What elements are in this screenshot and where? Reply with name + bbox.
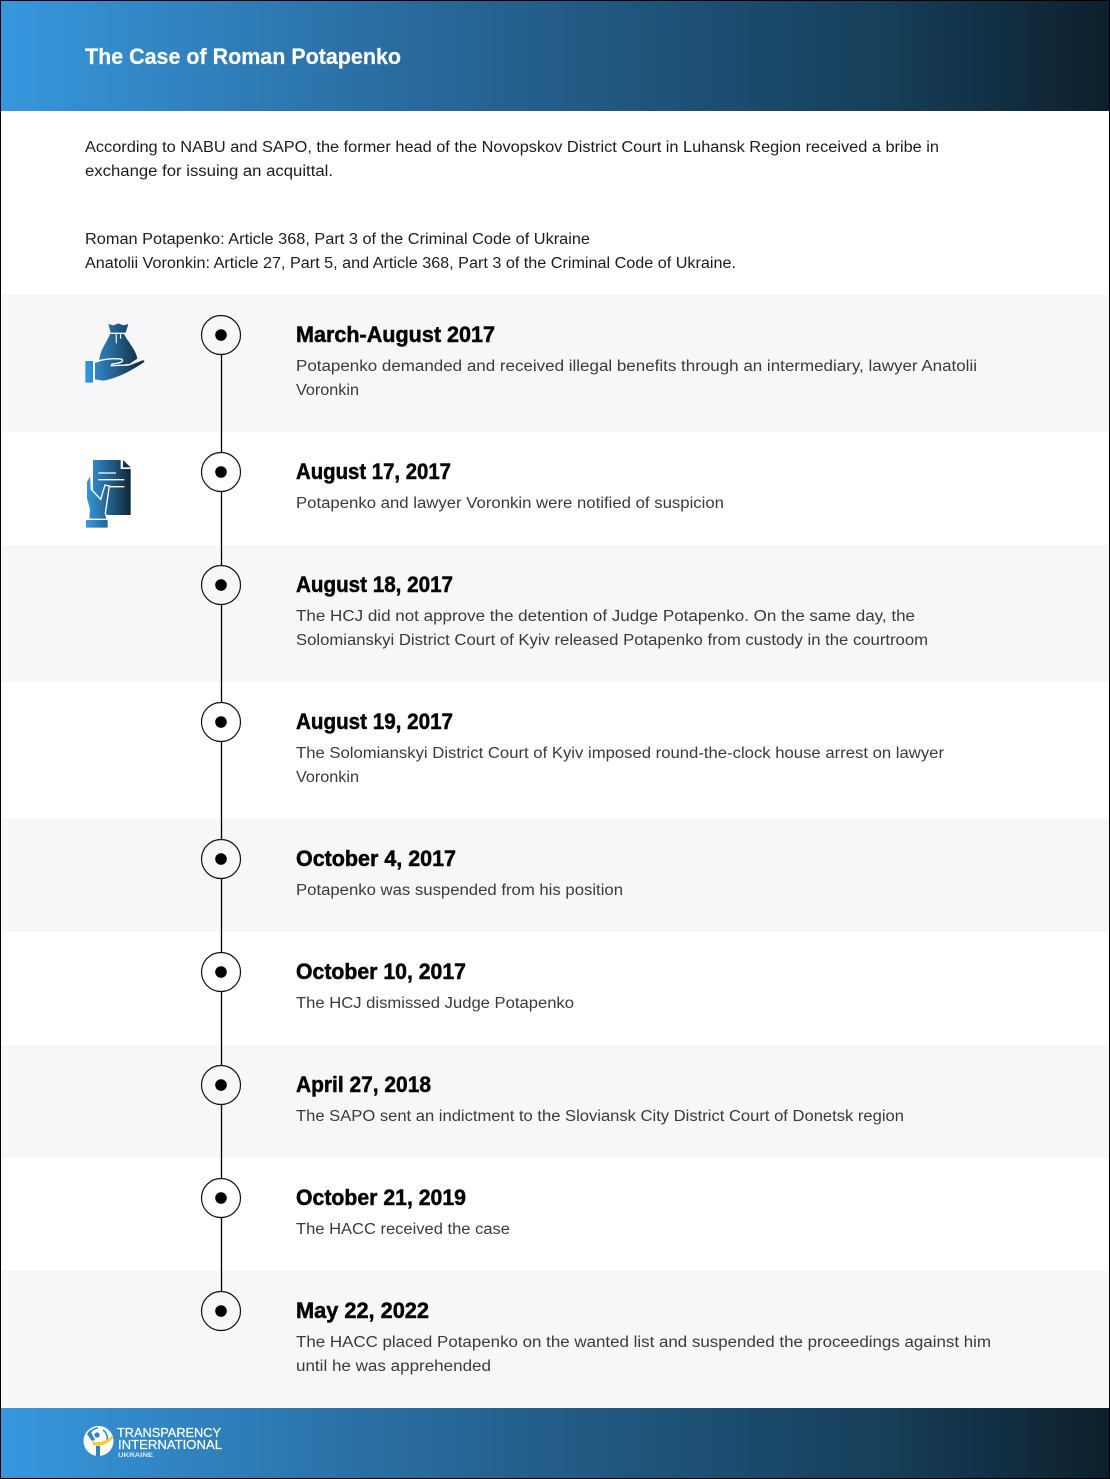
- timeline marker 3: [202, 566, 240, 604]
- logo: Transparency International Ukraine: UKRAINE: [118, 1452, 154, 1459]
- event 8: The HACC received the case: [296, 1221, 510, 1238]
- event 9: until he was apprehended: [296, 1358, 491, 1375]
- event 2: Potapenko and lawyer Voronkin were notified of suspicion: [296, 495, 724, 512]
- event 6: [202, 952, 574, 1012]
- event 4: Voronkin: [296, 769, 359, 786]
- event 5: Potapenko was suspended from his position: [296, 882, 623, 899]
- timeline marker 2: [202, 452, 240, 492]
- event 4: [202, 702, 944, 786]
- icon: hand holding document: [86, 460, 131, 528]
- event 6: The HCJ dismissed Judge Potapenko: [296, 995, 574, 1012]
- title: The Case of Roman Potapenko: [85, 44, 401, 69]
- intro text: [85, 139, 939, 180]
- event 7: [202, 1066, 904, 1125]
- charges text: [85, 231, 736, 272]
- intro text: exchange for issuing an acquittal.: [85, 163, 333, 180]
- event 2: [202, 452, 724, 512]
- event 8: October 21, 2019: [296, 1185, 466, 1210]
- logo: Transparency International Ukraine: INTERNATIONAL: [118, 1438, 222, 1452]
- event 5: October 4, 2017: [296, 846, 456, 871]
- event 7: April 27, 2018: [296, 1072, 431, 1097]
- panel: row band 1: [1, 295, 1109, 432]
- event 6: October 10, 2017: [296, 959, 466, 984]
- event 3: [202, 566, 928, 649]
- footer band: [1, 1408, 1109, 1478]
- event 4: The Solomianskyi District Court of Kyiv imposed round-the-clock house arrest on lawyer: [296, 745, 944, 762]
- timeline marker 9: [202, 1292, 240, 1330]
- event 3: August 18, 2017: [296, 572, 453, 597]
- charges text: Anatolii Voronkin: Article 27, Part 5, and Article 368, Part 3 of the Criminal Code of Ukraine.: [85, 255, 736, 272]
- timeline marker 5: [202, 840, 240, 878]
- intro text: According to NABU and SAPO, the former head of the Novopskov District Court in Luhansk Region received a bribe in: [85, 139, 939, 156]
- logo: Transparency International Ukraine: TRANSPARENCY: [117, 1426, 222, 1440]
- event 3: Solomianskyi District Court of Kyiv released Potapenko from custody in the courtroom: [296, 632, 928, 649]
- panel: row band 3: [1, 545, 1109, 682]
- event 7: The SAPO sent an indictment to the Sloviansk City District Court of Donetsk region: [296, 1108, 904, 1125]
- panel: row band 9: [1, 1271, 1109, 1408]
- timeline marker 6: [202, 952, 240, 992]
- timeline axis: [220, 354, 222, 1291]
- event 5: [202, 840, 623, 899]
- logo: Transparency International Ukraine: [84, 1426, 222, 1459]
- event 3: The HCJ did not approve the detention of Judge Potapenko. On the same day, the: [296, 608, 915, 625]
- event 9: May 22, 2022: [296, 1298, 429, 1323]
- panel: row band 7: [1, 1045, 1109, 1158]
- charges text: Roman Potapenko: Article 368, Part 3 of the Criminal Code of Ukraine: [85, 231, 590, 248]
- event 9: [202, 1292, 991, 1375]
- timeline marker 4: [202, 702, 240, 742]
- event 4: August 19, 2017: [296, 709, 453, 734]
- event 9: The HACC placed Potapenko on the wanted list and suspended the proceedings against him: [296, 1334, 991, 1351]
- event 8: [202, 1178, 510, 1238]
- event 1: Potapenko demanded and received illegal benefits through an intermediary, lawyer Anatolii: [296, 358, 977, 375]
- panel: row band 5: [1, 819, 1109, 932]
- logo emblem: [84, 1426, 114, 1456]
- icon: money bag on hand: [85, 323, 145, 383]
- header band: [1, 1, 1109, 111]
- event 1: [202, 316, 977, 399]
- timeline marker 1: [202, 316, 240, 354]
- event 2: August 17, 2017: [296, 459, 451, 484]
- event 1: March-August 2017: [296, 322, 495, 347]
- timeline marker 8: [202, 1178, 240, 1218]
- timeline marker 7: [202, 1066, 240, 1104]
- event 1: Voronkin: [296, 382, 359, 399]
